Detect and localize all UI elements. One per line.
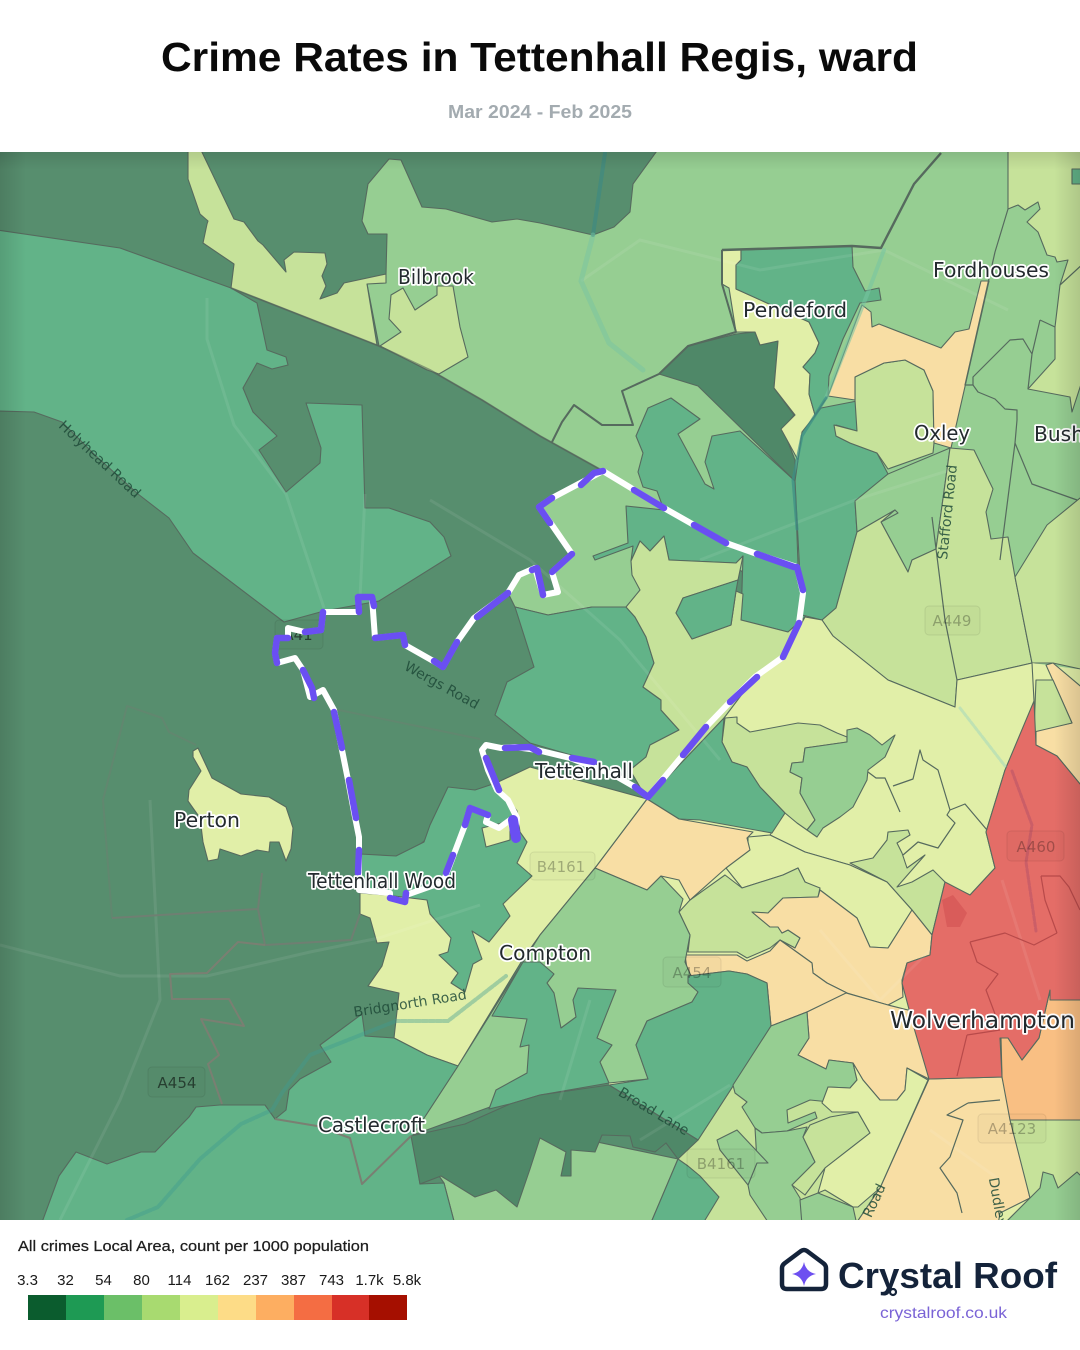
rivers and canals <box>127 153 1036 1220</box>
legend tick labels: 1.7k <box>355 1272 384 1289</box>
choropleth areas <box>0 148 1080 1225</box>
logo wordmark: Crystal Roof <box>838 1255 1058 1296</box>
road labels: Broad Lane <box>615 1085 692 1139</box>
legend tick labels: 237 <box>243 1272 268 1289</box>
place labels: Tettenhall Wood <box>307 869 456 893</box>
panel: choropleth map <box>0 148 1080 1228</box>
legend tick labels: 80 <box>133 1272 150 1289</box>
place labels: Bilbrook <box>398 265 474 289</box>
road number badges: A454 <box>673 964 711 982</box>
place labels: Pendeford <box>743 298 847 322</box>
website link: crystalroof.co.uk <box>880 1305 1008 1322</box>
road number badges: A4123 <box>988 1120 1036 1138</box>
place labels: Perton <box>174 808 240 832</box>
road labels: Bridgnorth Road <box>353 987 468 1021</box>
legend tick labels: 114 <box>168 1272 191 1289</box>
place labels <box>174 258 1080 1137</box>
legend tick labels: 387 <box>281 1272 306 1289</box>
legend tick labels: 743 <box>319 1272 344 1289</box>
place labels: Fordhouses <box>933 258 1049 282</box>
place labels: Oxley <box>914 421 970 445</box>
road labels: Dudley <box>985 1176 1009 1228</box>
road number badges <box>148 606 1064 1178</box>
legend tick labels: 3.3 <box>17 1272 38 1289</box>
legend tick labels <box>17 1272 422 1289</box>
ward boundary: Tettenhall Regis <box>275 471 803 902</box>
road network <box>0 240 1040 1220</box>
legend colour scale <box>28 1295 407 1320</box>
legend tick labels: 5.8k <box>393 1272 422 1289</box>
area boundary lines <box>103 153 1080 1213</box>
road number badges: B4161 <box>537 858 585 876</box>
legend tick labels: 162 <box>205 1272 230 1289</box>
road number badges: B4161 <box>697 1155 745 1173</box>
road labels: Road <box>860 1182 889 1220</box>
road labels: Holyhead Road <box>55 418 143 502</box>
legend title: All crimes Local Area, count per 1000 population <box>18 1238 369 1255</box>
logo key ring <box>890 1289 896 1295</box>
road labels: Stafford Road <box>935 464 961 560</box>
road labels <box>55 418 1009 1228</box>
legend tick labels: 54 <box>95 1272 112 1289</box>
road number badges: A449 <box>933 612 971 630</box>
place labels: Tettenhall <box>534 759 633 783</box>
logo: Crystal Roof <box>782 1250 1058 1296</box>
place labels: Castlecroft <box>318 1113 425 1137</box>
place labels: Wolverhampton <box>890 1008 1075 1034</box>
place labels: Compton <box>499 941 591 965</box>
title: Crime Rates in Tettenhall Regis, ward <box>161 34 918 80</box>
legend tick labels: 32 <box>57 1272 74 1289</box>
road number badges: A454 <box>158 1074 196 1092</box>
road number badges: A460 <box>1017 838 1055 856</box>
subtitle: date range: Mar 2024 - Feb 2025 <box>448 102 632 122</box>
icon: house with star <box>782 1250 826 1289</box>
road number badges: A41 <box>283 626 313 644</box>
map edge shading <box>0 152 1080 1220</box>
road labels: Wergs Road <box>401 659 482 713</box>
